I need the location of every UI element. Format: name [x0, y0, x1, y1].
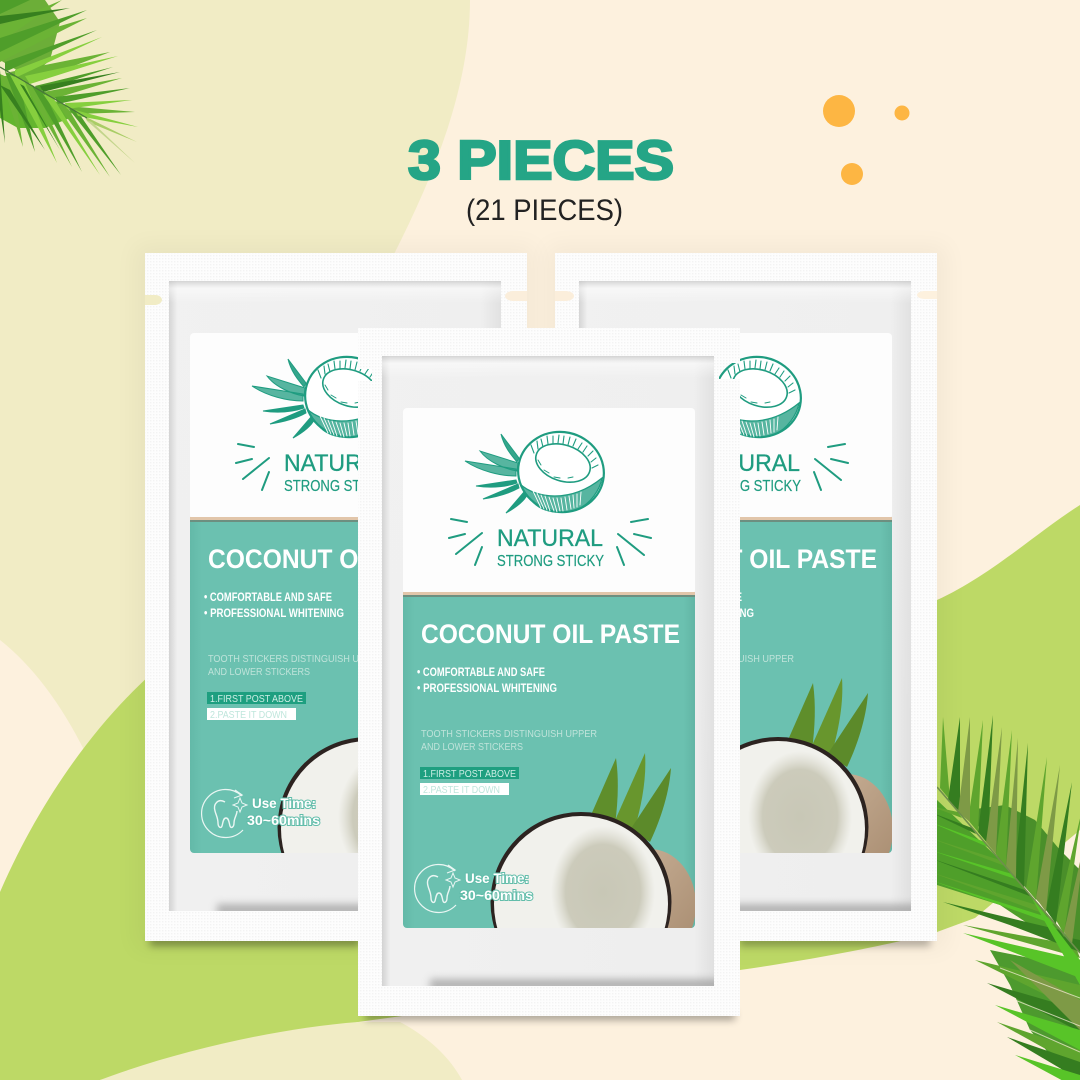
left bullets: • COMFORTABLE AND SAFE	[204, 592, 332, 604]
right logo text: NATURAL	[694, 450, 800, 477]
left logo text	[284, 450, 391, 495]
right logo text	[694, 450, 801, 495]
left step tags: 2.PASTE IT DOWN	[210, 710, 287, 721]
left logo text: NATURAL	[284, 450, 390, 477]
palm frond top left	[0, 0, 138, 177]
left bullets: • PROFESSIONAL WHITENING	[204, 608, 344, 620]
left note	[208, 654, 384, 678]
left note: TOOTH STICKERS DISTINGUISH UPPER	[208, 654, 384, 665]
pack: center sachet	[358, 328, 740, 1016]
center use time: Use Time:	[465, 870, 529, 886]
right logo text: STRONG STICKY	[694, 478, 801, 495]
center note: AND LOWER STICKERS	[421, 742, 523, 753]
right note: AND LOWER STICKERS	[618, 667, 720, 678]
center step tags	[420, 767, 519, 796]
back-pack logo edge showing through right seal notch	[719, 363, 740, 379]
center note: TOOTH STICKERS DISTINGUISH UPPER	[421, 729, 597, 740]
center use time: 30~60mins	[460, 887, 533, 903]
left logo coconut	[236, 349, 438, 490]
left step tags: 1.FIRST POST ABOVE	[210, 694, 303, 705]
left use time: 30~60mins	[247, 812, 320, 828]
left logo text: STRONG STICKY	[284, 478, 391, 495]
right coconut photo	[688, 678, 893, 917]
left use time: Use Time:	[252, 795, 316, 811]
right bullets	[614, 592, 754, 620]
left coconut photo	[278, 678, 483, 917]
title: 3 PIECES	[408, 129, 674, 191]
center logo text: NATURAL	[497, 525, 603, 552]
center bullets	[417, 667, 557, 695]
left step tags	[207, 692, 306, 721]
subtitle: (21 PIECES)	[466, 194, 623, 227]
center step tags: 1.FIRST POST ABOVE	[423, 769, 516, 780]
right bullets: • PROFESSIONAL WHITENING	[614, 608, 754, 620]
center logo text: STRONG STICKY	[497, 553, 604, 570]
pack: right sachet	[555, 253, 937, 941]
center note	[421, 729, 597, 753]
center logo text	[497, 525, 604, 570]
back-pack logo edge showing through left seal notch	[358, 369, 372, 381]
seal notches on back packs	[145, 291, 937, 305]
center use time	[415, 864, 533, 912]
right bullets: • COMFORTABLE AND SAFE	[614, 592, 742, 604]
center bullets: • COMFORTABLE AND SAFE	[417, 667, 545, 679]
left use time	[202, 789, 320, 837]
center coconut photo	[490, 753, 696, 992]
center bullets: • PROFESSIONAL WHITENING	[417, 683, 557, 695]
pack shadows	[135, 245, 947, 1020]
left note: AND LOWER STICKERS	[208, 667, 310, 678]
palm frond bottom right	[930, 715, 1080, 1080]
center logo coconut	[449, 424, 651, 565]
right headline: COCONUT OIL PASTE	[618, 544, 877, 574]
left headline: COCONUT OIL PASTE	[208, 544, 467, 574]
pack: left sachet	[145, 253, 527, 941]
center step tags: 2.PASTE IT DOWN	[423, 785, 500, 796]
decorative orange dots	[823, 95, 910, 185]
left bullets	[204, 592, 344, 620]
right note: TOOTH STICKERS DISTINGUISH UPPER	[618, 654, 794, 665]
right note	[618, 654, 794, 678]
center headline: COCONUT OIL PASTE	[421, 619, 680, 649]
right logo coconut	[646, 349, 848, 490]
